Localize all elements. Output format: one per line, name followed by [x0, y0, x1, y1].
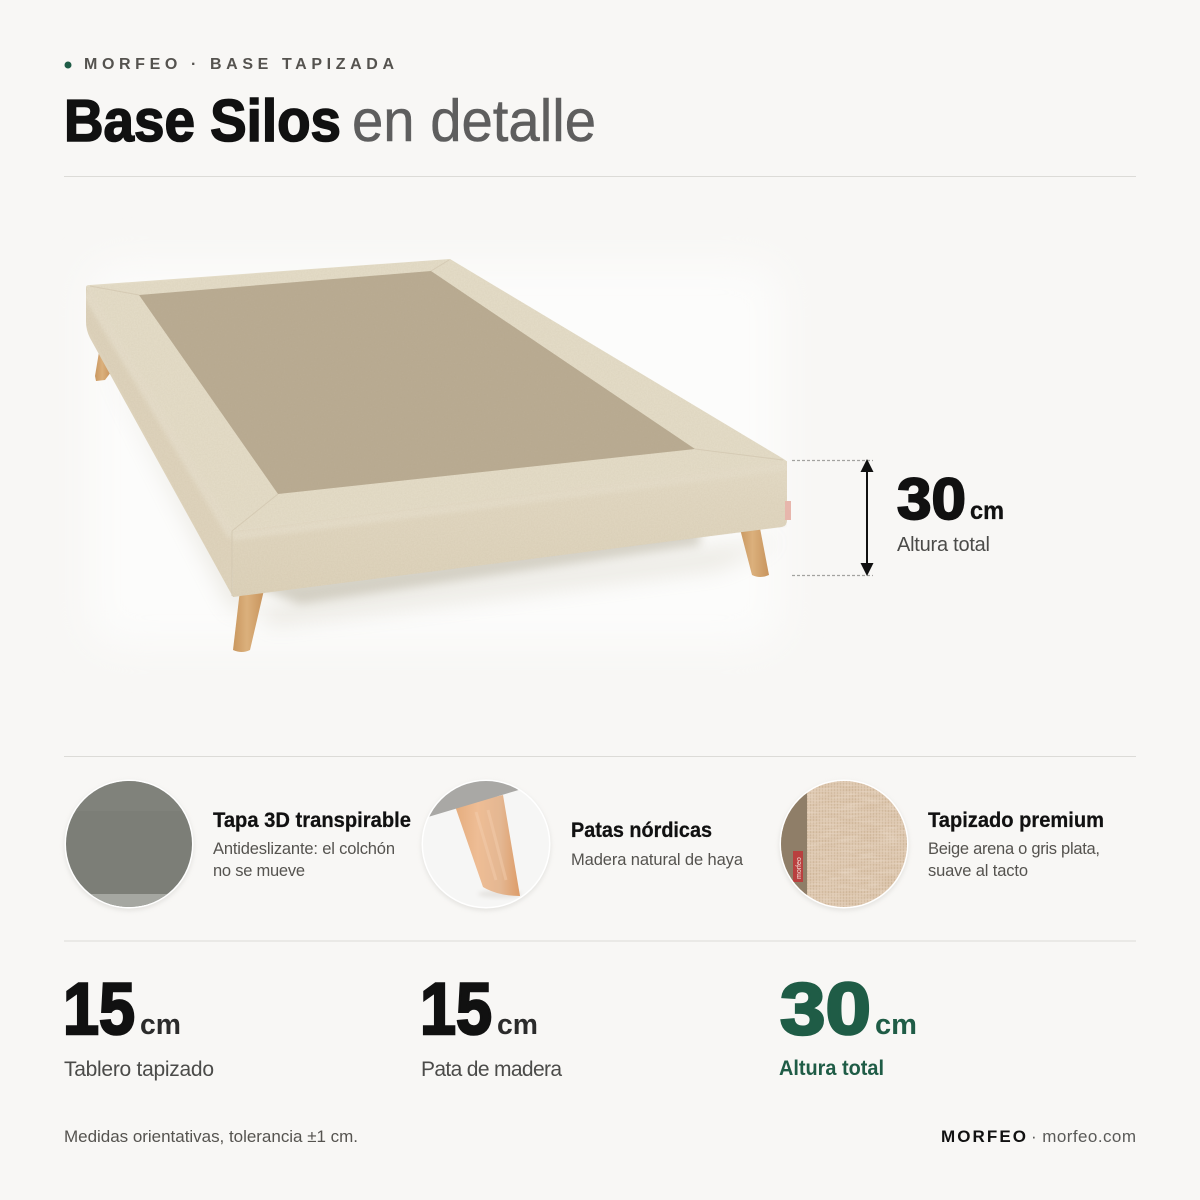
soft rounded edges	[86, 292, 570, 539]
fabric label tag	[785, 501, 791, 520]
feature: Tapizado premium: Beige arena o gris plata,	[928, 840, 1100, 858]
stat: altura total	[779, 969, 917, 1080]
stat: pata: 15	[420, 969, 492, 1050]
stat: altura total: 30	[780, 969, 871, 1050]
height dimension	[792, 459, 874, 576]
front-left leg	[233, 590, 264, 652]
footer brand: MORFEO	[941, 1127, 1026, 1146]
seams	[90, 260, 783, 596]
icon: fabric swatch: morfeo	[796, 857, 803, 879]
product image: upholstered bed base	[86, 259, 791, 652]
stat: altura total: Altura total	[779, 1057, 884, 1080]
feature: Tapizado premium: suave al tacto	[928, 862, 1028, 880]
floor shadow	[100, 350, 780, 625]
footer brand: · morfeo.com	[1031, 1127, 1136, 1146]
title	[64, 88, 596, 154]
footnote: Medidas orientativas, tolerancia ±1 cm.	[64, 1127, 358, 1146]
feature: Tapa 3D: Tapa 3D transpirable	[213, 809, 411, 832]
stat: altura total: cm	[875, 1009, 917, 1041]
back-left leg	[95, 352, 111, 381]
center board	[139, 271, 695, 494]
eyebrow: MORFEO · BASE TAPIZADA	[84, 56, 394, 73]
height value: Altura total	[897, 534, 990, 556]
height value: cm	[970, 497, 1004, 525]
feature: Patas nórdicas: Madera natural de haya	[571, 851, 744, 869]
feature: Tapa 3D: no se mueve	[213, 862, 305, 880]
feature: Tapizado premium	[779, 780, 1104, 911]
front face	[232, 461, 787, 597]
feature: Tapizado premium: Tapizado premium	[928, 809, 1104, 832]
front-right leg	[739, 523, 769, 577]
stat: tablero	[63, 969, 214, 1081]
footer brand	[941, 1127, 1136, 1146]
stat: tablero: Tablero tapizado	[64, 1058, 214, 1081]
stat: pata	[420, 969, 562, 1081]
icon: wooden leg	[420, 770, 555, 911]
feature: Tapa 3D: Antideslizante: el colchón	[213, 840, 395, 858]
title: Base Silos	[64, 88, 341, 154]
title: en detalle	[352, 88, 596, 154]
feature: Patas nórdicas: Patas nórdicas	[571, 819, 712, 842]
height value	[897, 467, 1004, 556]
top frame	[86, 259, 787, 531]
icon: fabric swatch	[779, 780, 910, 911]
icon: grey 3D fabric	[64, 780, 194, 912]
stat: pata: cm	[497, 1009, 538, 1041]
stat: tablero: 15	[63, 969, 135, 1050]
left side face	[86, 287, 233, 597]
feature: Tapa 3D	[60, 775, 411, 915]
height value: 30	[897, 467, 966, 532]
stat: tablero: cm	[140, 1009, 181, 1041]
feature: Patas nórdicas	[420, 770, 744, 911]
fabric grain	[86, 259, 787, 597]
stat: pata: Pata de madera	[421, 1058, 562, 1081]
